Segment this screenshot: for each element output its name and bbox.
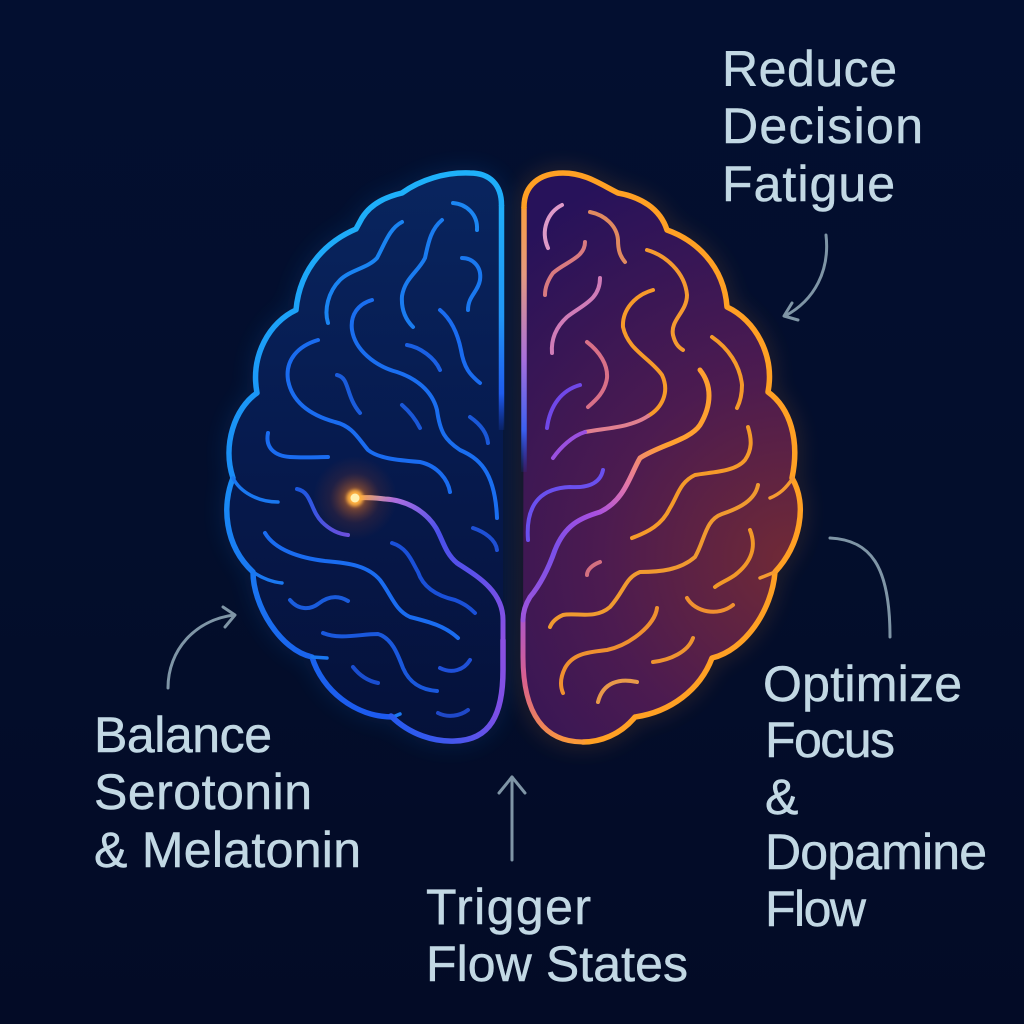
right hemisphere folds [528,205,758,702]
label: Trigger Flow States [426,879,688,992]
label: Reduce Decision Fatigue [722,41,923,212]
label: Optimize Focus & Dopamine Flow [763,656,987,937]
label: Balance Serotonin & Melatonin: Balance [94,707,272,763]
arrow: to Trigger Flow States [499,777,525,860]
arrow: to Optimize Focus & Dopamine Flow [830,538,890,637]
label: Balance Serotonin & Melatonin: & Melatonin [94,822,361,878]
arrow: to Balance Serotonin & Melatonin [168,607,235,688]
label: Reduce Decision Fatigue: Fatigue [722,156,895,212]
label: Optimize Focus & Dopamine Flow: & [765,769,798,825]
label: Reduce Decision Fatigue: Decision [722,98,923,154]
right hemisphere glow [523,173,800,742]
right hemisphere outline [523,173,800,742]
label: Balance Serotonin & Melatonin [94,707,361,878]
label: Optimize Focus & Dopamine Flow: Optimize [763,656,962,712]
label: Reduce Decision Fatigue: Reduce [722,41,897,97]
brain illustration [227,173,800,742]
right hemisphere fill [523,173,800,742]
label: Optimize Focus & Dopamine Flow: Focus [765,712,895,768]
label: Trigger Flow States: Trigger [426,879,591,935]
label: Optimize Focus & Dopamine Flow: Flow [765,881,867,937]
label: Optimize Focus & Dopamine Flow: Dopamine [765,824,987,880]
left hemisphere glow [227,173,503,741]
left hemisphere fill [227,173,503,741]
label: Balance Serotonin & Melatonin: Serotonin [94,764,312,820]
label: Trigger Flow States: Flow States [426,936,688,992]
left hemisphere folds [265,203,497,716]
glowing spark [313,456,397,540]
arrow: to Reduce Decision Fatigue [784,235,827,320]
left hemisphere outline [227,173,503,741]
